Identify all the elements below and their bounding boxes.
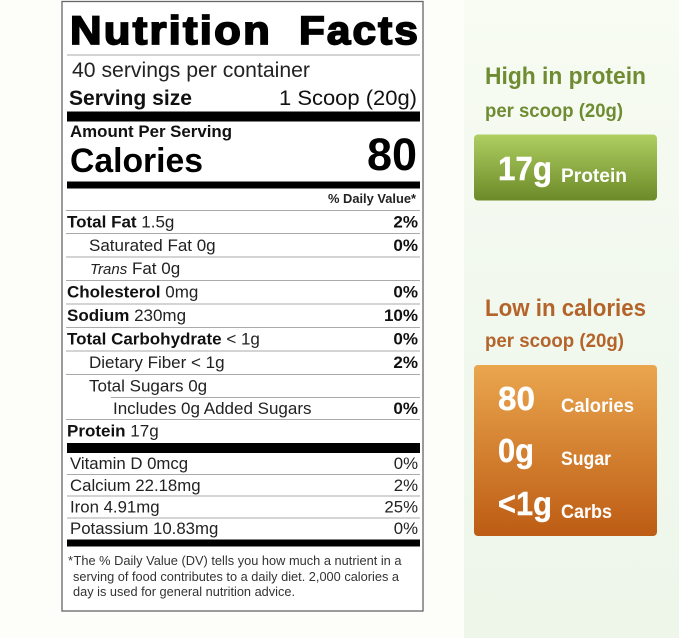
row: vitamin D: 0%	[394, 454, 418, 473]
heading: low in calories: Low in calories	[485, 295, 646, 322]
row: saturated fat: 0%	[393, 236, 418, 255]
row: saturated fat	[89, 236, 418, 255]
row: dietary fiber: Dietary Fiber < 1g	[89, 353, 225, 372]
row: trans fat: Trans Fat 0g	[90, 259, 180, 278]
row: calories: Calories	[70, 142, 203, 180]
heading: Nutrition Facts: Facts	[299, 9, 420, 53]
row: potassium: 0%	[394, 519, 418, 538]
stat: sugar: Sugar	[561, 448, 611, 470]
stat: carbs: Carbs	[561, 501, 612, 523]
stat: carbs: <1g	[498, 485, 552, 522]
row: total carbohydrate: Total Carbohydrate < 1g	[67, 330, 260, 348]
footnote: The % Daily Value (DV) tells you how much a nutrient in a	[74, 553, 402, 568]
row: iron: Iron 4.91mg	[70, 498, 160, 516]
row: added sugars: 0%	[393, 399, 418, 418]
heading: Nutrition Facts	[70, 9, 420, 53]
row: sodium: Sodium 230mg	[67, 306, 186, 325]
row: iron: 25%	[384, 498, 418, 516]
footnote: serving of food contributes to a daily diet. 2,000 calories a	[73, 569, 400, 584]
stat: calories: Calories	[561, 395, 634, 417]
text: servings per container: 40 servings per container	[72, 59, 310, 82]
text: amount per serving: Amount Per Serving	[70, 122, 232, 141]
callout: calories, sugar, carbs	[474, 365, 657, 536]
right side panel background	[464, 0, 679, 638]
stat: sugar: 0g	[498, 432, 534, 469]
callout: protein: Protein	[561, 165, 627, 187]
row: cholesterol: Cholesterol 0mg	[67, 282, 198, 302]
row: serving size	[69, 86, 417, 110]
row: total fat: Total Fat 1.5g	[67, 212, 174, 232]
subheading: per scoop, protein: per scoop (20g)	[485, 101, 623, 122]
row: dietary fiber: 2%	[393, 353, 418, 372]
footnote: day is used for general nutrition advice.	[73, 584, 295, 599]
row: calories: 80	[367, 129, 417, 180]
row: total sugars: Total Sugars 0g	[89, 376, 207, 396]
footnote: *	[68, 553, 73, 568]
stat: calories: 80	[498, 380, 535, 417]
row: cholesterol: 0%	[393, 282, 418, 302]
stat: calories	[498, 380, 634, 417]
heading: Nutrition Facts: Nutrition	[70, 9, 272, 53]
panel: nutrition facts label	[62, 2, 423, 611]
stat: sugar	[498, 432, 611, 470]
row: added sugars	[113, 399, 418, 418]
callout: protein	[474, 134, 657, 200]
footnote	[68, 553, 402, 599]
heading: high in protein: High in protein	[485, 63, 646, 90]
row: calcium: 2%	[394, 476, 418, 495]
row: added sugars: Includes 0g Added Sugars	[113, 399, 311, 418]
row: vitamin D: Vitamin D 0mcg	[70, 454, 188, 473]
row: dietary fiber	[89, 353, 418, 372]
row: potassium	[70, 519, 418, 538]
row: calcium: Calcium 22.18mg	[70, 476, 201, 495]
row: calories	[70, 129, 417, 180]
subheading: per scoop, calories: per scoop (20g)	[485, 331, 624, 352]
callout: protein: 17g	[498, 150, 552, 187]
row: total carbohydrate	[67, 330, 418, 348]
row: serving size: 1 Scoop (20g)	[279, 86, 417, 110]
row: potassium: Potassium 10.83mg	[70, 519, 218, 538]
row: vitamin D	[70, 454, 418, 473]
row: saturated fat: Saturated Fat 0g	[89, 236, 216, 255]
row: calcium	[70, 476, 418, 495]
row: sodium	[67, 306, 418, 325]
row: protein: Protein 17g	[67, 422, 159, 440]
row: total fat	[67, 212, 418, 232]
row: serving size: Serving size	[69, 87, 192, 110]
row: iron	[70, 498, 418, 516]
stat: carbs	[498, 485, 612, 523]
row: cholesterol	[67, 282, 418, 302]
row: total carbohydrate: 0%	[393, 330, 418, 348]
row: total fat: 2%	[393, 212, 418, 232]
row: sodium: 10%	[384, 306, 418, 325]
text: percent daily value: % Daily Value*	[328, 192, 416, 206]
